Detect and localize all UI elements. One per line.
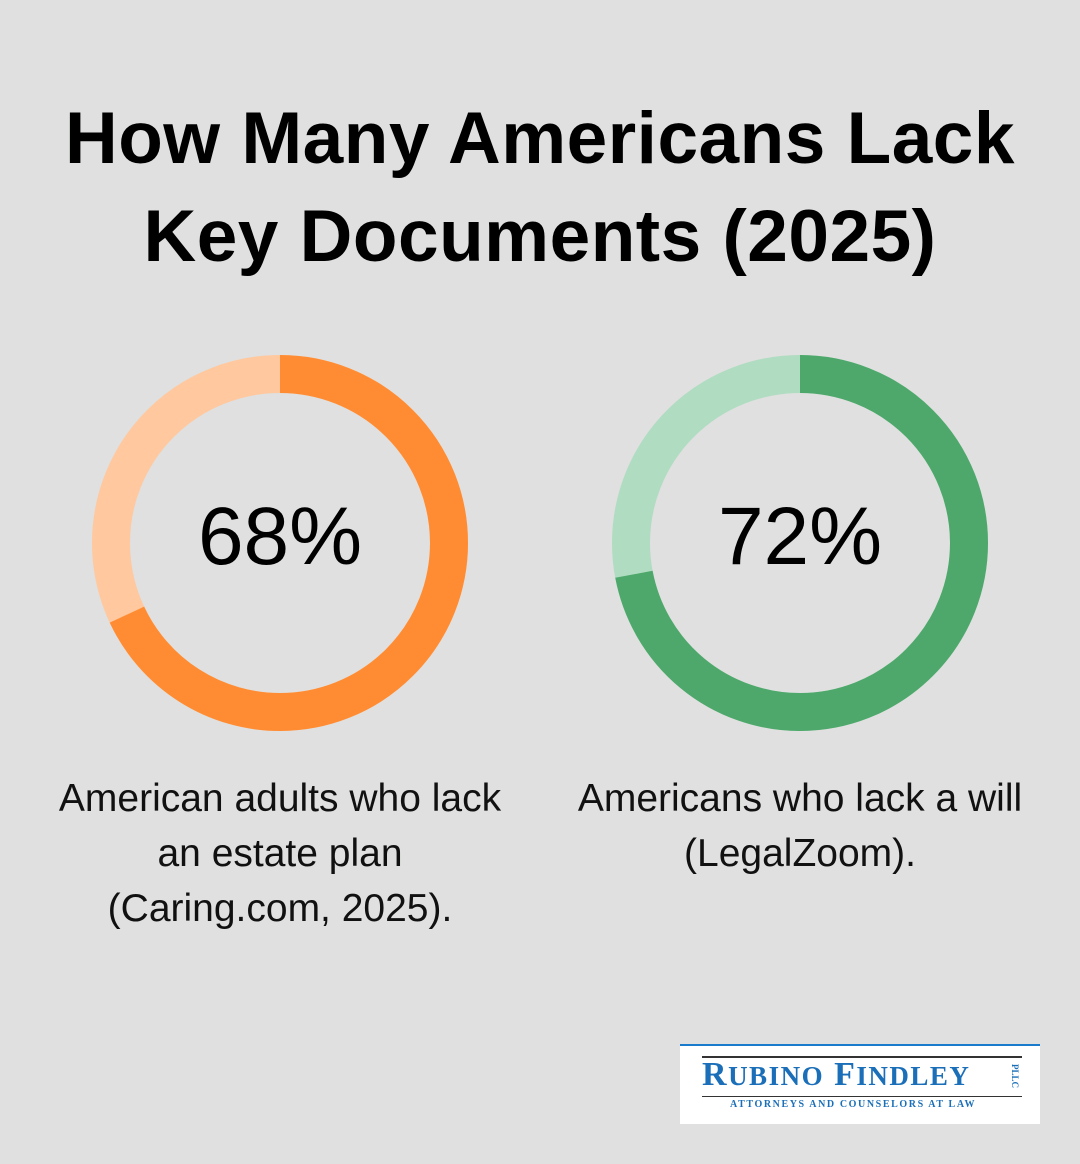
caption right: (LegalZoom).: [684, 832, 916, 875]
donut chart: 68%: [92, 355, 468, 731]
logo: [680, 1044, 1040, 1124]
caption right: [578, 777, 1022, 875]
title: How Many Americans Lack: [65, 98, 1015, 179]
value: 68%: 68%: [198, 491, 362, 582]
title: Key Documents (2025): [143, 196, 936, 277]
caption left: an estate plan: [157, 832, 403, 875]
caption left: (Caring.com, 2025).: [108, 887, 452, 930]
value: 72%: 72%: [718, 491, 882, 582]
logo: ATTORNEYS AND COUNSELORS AT LAW: [730, 1099, 976, 1110]
caption left: American adults who lack: [59, 777, 501, 820]
caption left: [59, 777, 502, 930]
donut chart: 72%: [612, 355, 988, 731]
logo: RUBINO FINDLEY: [702, 1056, 970, 1093]
logo: PLLC: [1010, 1064, 1020, 1088]
caption right: Americans who lack a will: [578, 777, 1022, 820]
title: [65, 98, 1015, 277]
